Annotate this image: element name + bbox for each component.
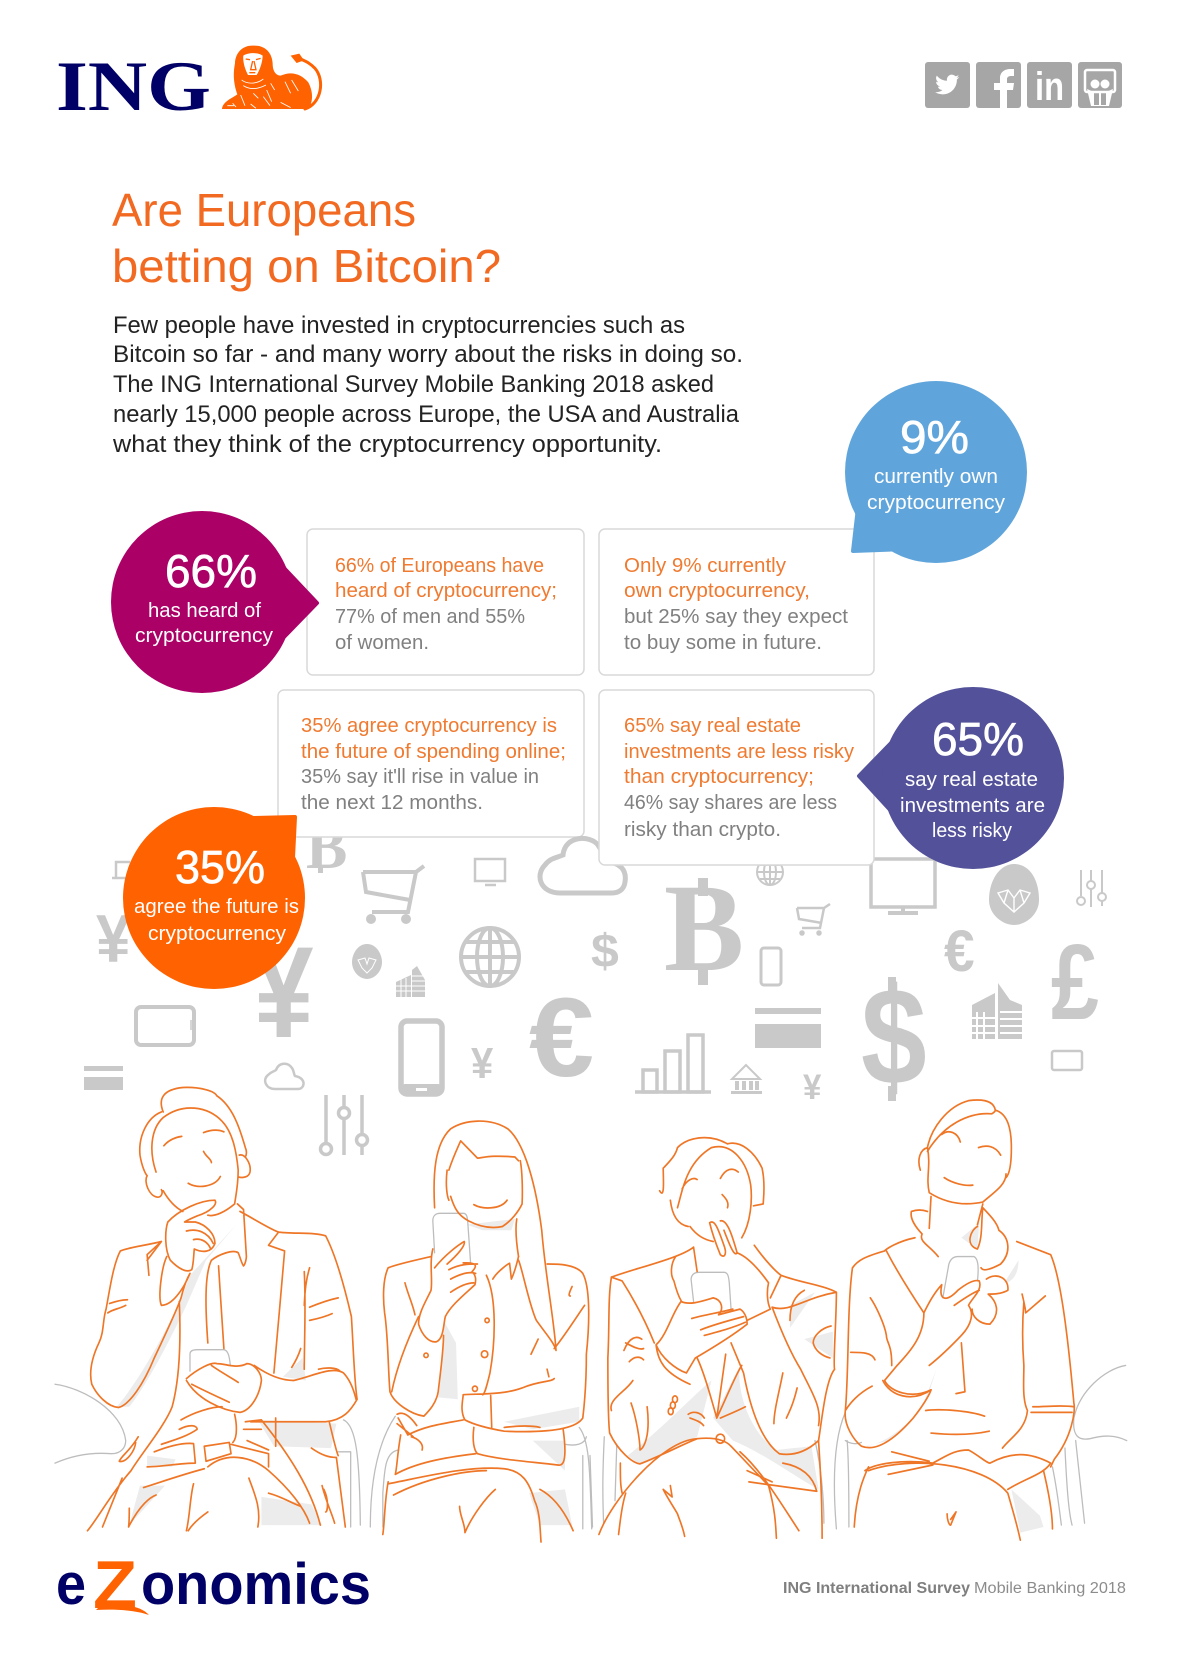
card: real estate: 46% say shares are less [624,791,837,814]
icon: globe [461,928,519,986]
bubble: 35% [123,807,305,989]
bubble: 9% [845,381,1027,563]
icon: sliders [320,1095,368,1155]
card: own cryptocurrency: own cryptocurrency, [624,579,810,602]
card: heard of cryptocurrency [307,529,584,675]
bubble: 65%: say real estate [905,768,1038,791]
card: heard of cryptocurrency: 77% of men and 55% [335,605,525,628]
card: heard of cryptocurrency: of women. [335,631,429,654]
icon: facebook [976,62,1021,108]
bubble: 65%: 65% [932,713,1024,765]
illustration: people with phones [55,1087,1127,1542]
card: future of spending: 35% say it'll rise in value in [301,765,539,788]
card: real estate: investments are less risky [624,740,855,763]
title [112,184,501,292]
icon: small cloud [265,1064,304,1089]
intro text: nearly 15,000 people across Europe, the USA and Australia [113,401,740,428]
card: own cryptocurrency [599,529,874,675]
bubble: 65%: investments are [900,794,1045,817]
icon: yen mid: ¥ [471,1038,494,1087]
source footer: Mobile Banking 2018 [974,1580,1126,1597]
card: future of spending: the future of spending online; [301,740,566,763]
icon: small globe [757,859,783,885]
bubble: 65% [859,687,1064,869]
eZonomics logo: e [56,1552,86,1617]
bubble: 35%: 35% [175,841,265,893]
icon: monitor large [871,859,935,913]
icon: small cart [797,904,830,934]
person 3: man with fingers at mouth [590,1138,836,1538]
icon: phone small [761,948,781,985]
social icons [925,62,1122,109]
icon: building small [396,966,425,997]
card: real estate: risky than crypto. [624,818,781,841]
icon: linkedin: in [1035,65,1064,109]
card: real estate: 65% say real estate [624,714,801,737]
ING logo [56,46,321,126]
icon: cart large [363,866,424,922]
person 4: man looking up with phone [834,1100,1127,1540]
icon: pound: £ [1051,922,1099,1042]
icon: small card [84,1066,123,1090]
card: future of spending: the next 12 months. [301,791,483,814]
source footer: ING International Survey [783,1580,970,1597]
icon: small tablet [1052,1051,1082,1070]
card: heard of cryptocurrency: heard of cryptocurrency; [335,579,557,602]
icon: laptop [112,862,130,878]
bubble: 35%: agree the future is [134,895,299,918]
icon: payment card [755,1008,821,1048]
bubble: 66%: has heard of [148,599,261,622]
icon: mask right [989,864,1039,925]
ING logo: ING [56,48,211,126]
card: heard of cryptocurrency: 66% of Europeans have [335,554,544,577]
card: real estate: than cryptocurrency; [624,765,814,788]
icon: twitter [925,62,970,108]
person 2: woman with long hair [370,1121,592,1542]
card: own cryptocurrency: Only 9% currently [624,554,787,577]
icon: yen large: ¥ [254,920,314,1065]
card: real estate [599,690,874,865]
icon: ING lion [222,46,321,109]
title: Are Europeans [112,184,416,236]
icon: euro large: € [529,975,594,1100]
intro text: what they think of the cryptocurrency opportunity. [112,431,662,458]
eZonomics logo [56,1547,371,1623]
icon: dollar large: $ [861,960,927,1114]
bubble: 66%: cryptocurrency [135,624,274,647]
icon: bitcoin large: B [664,859,744,998]
bubble: 66% [111,511,317,693]
intro text: Few people have invested in cryptocurrencies such as [113,312,685,339]
eZonomics logo: Z [93,1547,137,1623]
icon: yen left: ¥ [96,900,130,977]
bubble: 35%: cryptocurrency [148,922,287,945]
icon: mask small [352,944,382,979]
icon: bitcoin small: B [306,814,347,882]
intro text: The ING International Survey Mobile Banking 2018 asked [113,371,714,398]
icon: phone large [401,1021,442,1095]
bubble: 66%: 66% [165,545,257,597]
intro text: Bitcoin so far - and many worry about the risks in doing so. [113,341,743,368]
bubble: 65%: less risky [932,819,1013,842]
icon: euro small: € [944,919,975,983]
icon: small monitor [475,859,505,885]
card: own cryptocurrency: to buy some in future. [624,631,822,654]
icon: slideshare [1078,62,1122,108]
bubble: 9%: cryptocurrency [867,491,1006,514]
background currency and technology icons [84,814,1106,1155]
bubble: 9%: currently own [874,465,998,488]
icon: building large [972,983,1022,1039]
card: future of spending [278,690,584,837]
eZonomics logo: onomics [141,1552,371,1617]
card: future of spending: 35% agree cryptocurrency is [301,714,557,737]
person 1: man with hand on chin [55,1087,360,1531]
icon: dollar small: $ [591,925,619,978]
icon: tablet [136,1007,194,1045]
card: own cryptocurrency: but 25% say they expect [624,605,848,628]
intro text [112,312,743,458]
icon: bar chart [635,1035,711,1092]
title: betting on Bitcoin? [112,240,501,292]
icon: cloud large [540,838,625,893]
icon: bank [731,1065,762,1094]
bubble: 9%: 9% [900,411,969,463]
icon: sliders top right [1077,870,1106,907]
icon: yen low: ¥ [803,1068,821,1107]
source footer [783,1580,1126,1597]
